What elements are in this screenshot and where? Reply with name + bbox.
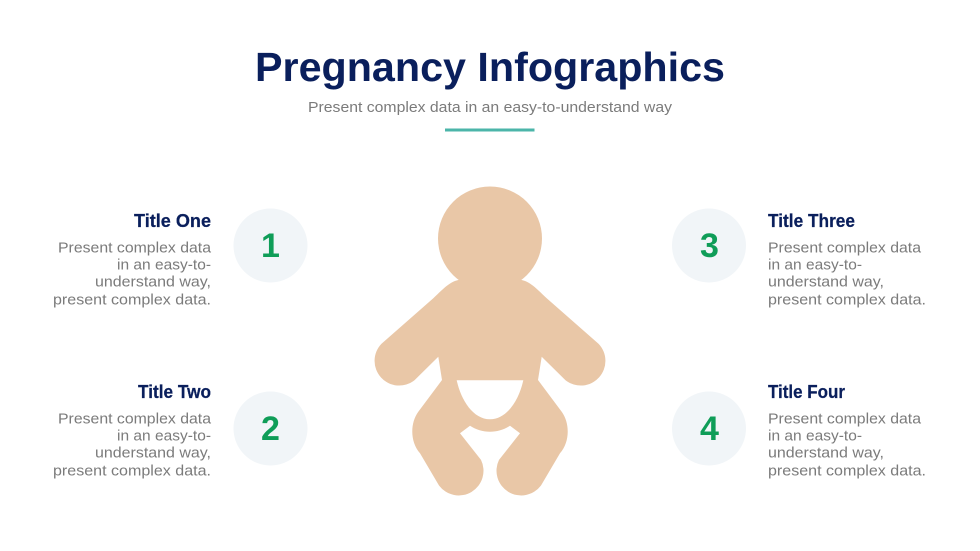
accent rule [445,128,534,132]
number badge 2: 2 [261,410,280,448]
text block 1: in an easy-to- [117,258,211,274]
heading: title three: Title Three [768,211,855,231]
text block 4 [768,412,926,480]
number badge 3: 3 [700,227,719,265]
number badge 4: 4 [700,410,719,448]
number badge 1 [234,208,308,282]
text block 2: present complex data. [53,464,211,480]
text block 4: Present complex data [768,412,922,428]
text block 1 [53,240,212,308]
text block 4: present complex data. [768,464,926,480]
panel: item 4 [672,382,926,480]
title: Pregnancy Infographics [255,44,725,90]
text block 1: Present complex data [58,240,212,256]
subtitle: Present complex data in an easy-to-understand way [308,100,673,116]
icon: baby [375,186,605,495]
text block 3 [768,240,926,308]
text block 2: in an easy-to- [117,428,211,444]
text block 3: in an easy-to- [768,258,862,274]
text block 3: Present complex data [768,240,922,256]
number badge 1: 1 [261,227,280,265]
panel: item 2 [53,382,308,480]
text block 4: understand way, [768,446,884,462]
number badge 4 [672,392,746,466]
number badge 3 [672,208,746,282]
heading: title one: Title One [134,211,211,231]
text block 2: understand way, [95,446,211,462]
diaper [457,380,523,419]
text block 2 [53,412,212,480]
text block 4: in an easy-to- [768,428,862,444]
panel: item 3 [672,208,926,308]
number badge 2 [234,392,308,466]
panel: item 1 [53,208,308,308]
text block 1: understand way, [95,274,211,290]
text block 1: present complex data. [53,292,211,308]
text block 3: understand way, [768,274,884,290]
text block 2: Present complex data [58,412,212,428]
heading: title four: Title Four [768,382,845,402]
text block 3: present complex data. [768,292,926,308]
heading: title two: Title Two [138,382,211,402]
